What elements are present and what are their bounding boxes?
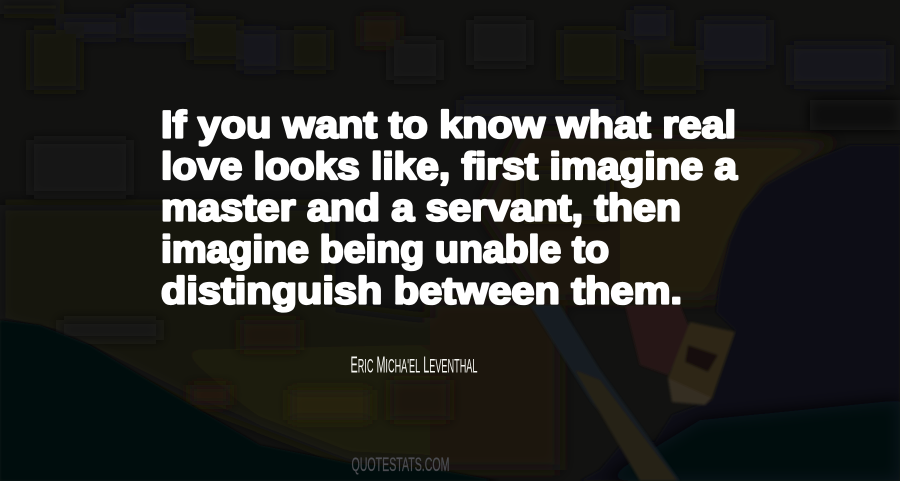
quote text: master and a servant, then	[161, 188, 681, 230]
quote text: If you want to know what real	[161, 104, 736, 146]
quote text	[161, 104, 738, 312]
quote text: distinguish between them.	[161, 270, 682, 312]
author name: ERIC MICHA'EL LEVENTHAL	[350, 352, 478, 378]
site credit: QUOTESTATS.COM	[352, 455, 450, 476]
city block tints	[0, 0, 60, 14]
quote text: love looks like, first imagine a	[161, 146, 738, 188]
shoreline water: right	[580, 145, 900, 481]
darker water toward the bottom right	[600, 400, 900, 481]
road and pier	[530, 305, 735, 481]
shoreline water: lower left	[0, 320, 500, 481]
quote text: imagine being unable to	[161, 229, 609, 271]
